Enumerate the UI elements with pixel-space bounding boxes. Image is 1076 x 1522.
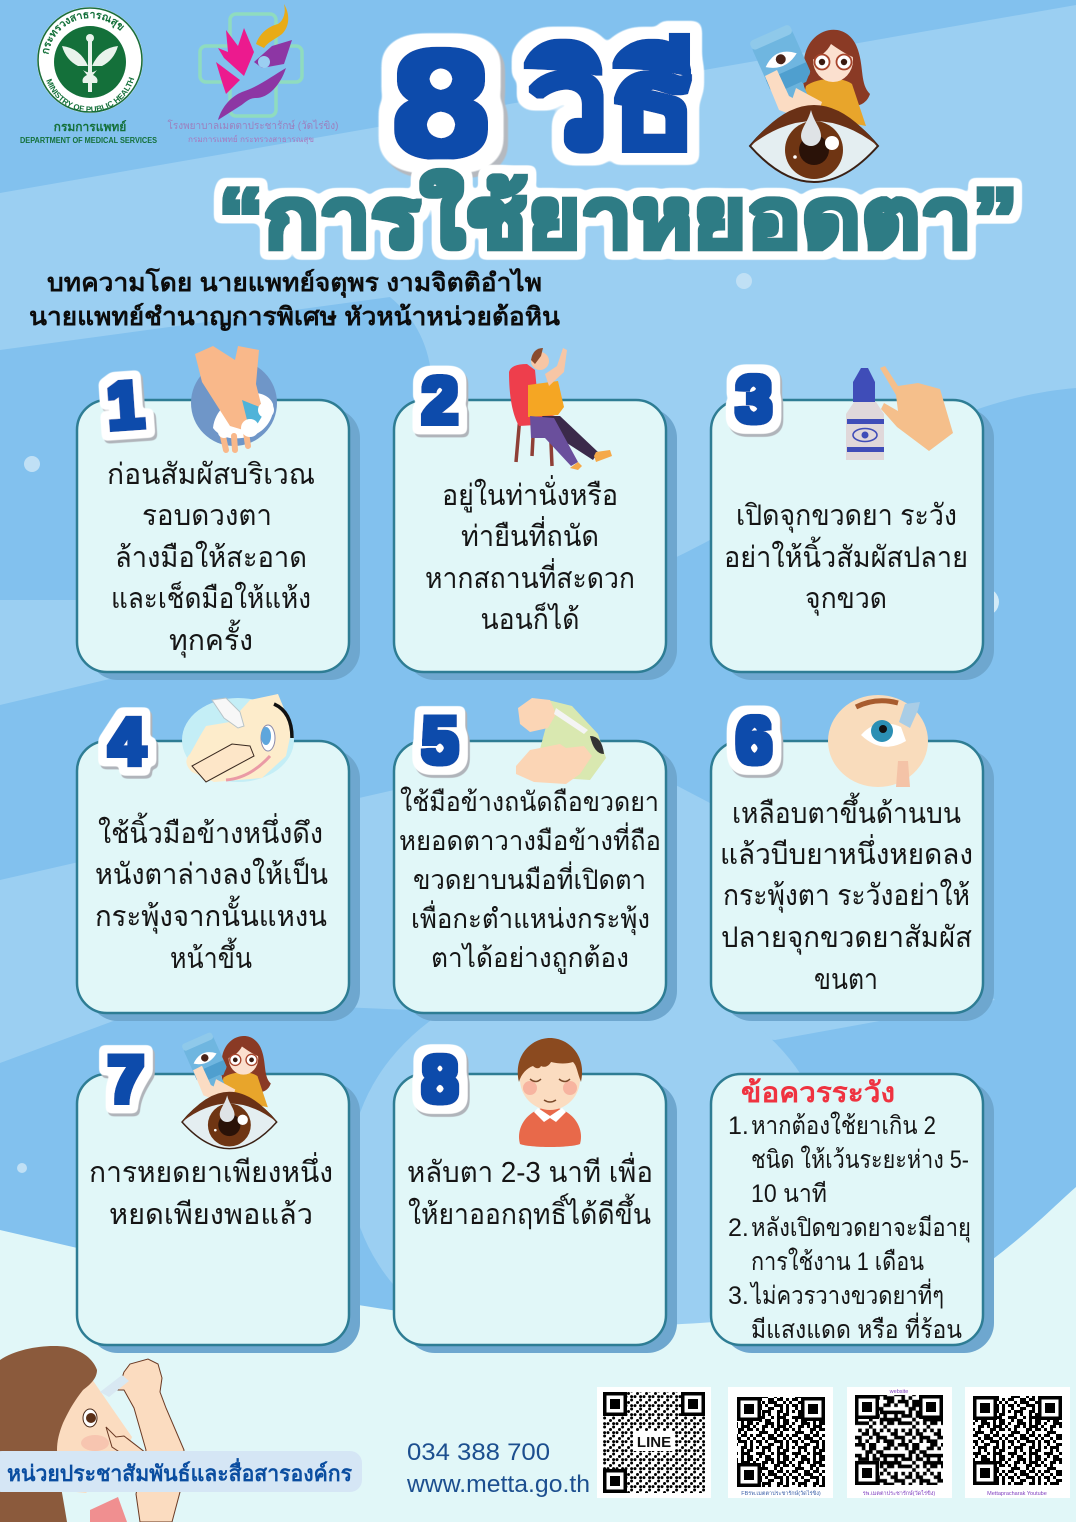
author text: บทความโดย นายแพทย์จตุพร งามจิตติอำไพ <box>47 267 542 299</box>
step 2 text <box>425 475 635 636</box>
panel: step 2 <box>394 348 677 680</box>
step 1 text: ทุกครั้ง <box>169 619 253 658</box>
contact details: www.metta.go.th <box>406 1471 590 1498</box>
icon: person sitting <box>509 348 612 470</box>
panel: step 7 <box>77 1032 360 1353</box>
step 2 text: อยู่ในท่านั่งหรือ <box>442 475 618 513</box>
step 4 text: ใช้นิ้วมือข้างหนึ่งดึง <box>98 812 323 850</box>
icon: bottle and finger <box>846 366 953 460</box>
logo: Ministry of Public Health: DEPARTMENT OF MEDICAL SERVICES <box>20 136 157 145</box>
step 5 text <box>399 786 661 974</box>
contact details: 034 388 700 <box>407 1439 550 1466</box>
step 6 text: แล้วบีบยาหนึ่งหยดลง <box>720 834 973 871</box>
step 3 text: อย่าให้นิ้วสัมผัสปลาย <box>724 536 968 574</box>
step 5 text: หยอดตาวางมือข้างที่ถือ <box>399 822 661 856</box>
cautions list <box>728 1111 971 1344</box>
step 1 text: และเช็ดมือให้แห้ง <box>111 580 311 615</box>
QR code: Facebook: FBรพ.เมตตาประชารักษ์(วัดไร่ขิง) <box>741 1490 821 1497</box>
step 4 text <box>95 812 328 975</box>
logo: Ministry of Public Health: กรมการแพทย์ <box>54 120 126 134</box>
cautions list: มีแสงแดด หรือ ที่ร้อน <box>751 1312 962 1344</box>
badge: number 7: 7 <box>108 1042 144 1116</box>
badge: number 6: 6 <box>736 703 772 777</box>
panel: step 5 <box>394 698 677 1021</box>
author text <box>29 267 560 331</box>
badge: number 1: 1 <box>104 367 146 443</box>
QR code: YouTube <box>965 1387 1070 1498</box>
step 6 text: ปลายจุกขวดยาสัมผัส <box>721 922 972 955</box>
logo: Ministry of Public Health: MINISTRY OF PUBLIC HEALTH <box>46 77 134 112</box>
contact details <box>406 1439 590 1498</box>
step 6 text: กระพุ้งตา ระวังอย่าให้ <box>723 878 970 913</box>
badge: number 4: 4 <box>109 704 146 778</box>
QR code: website: รพ.เมตตาประชารักษ์(วัดไร่ขิง) <box>863 1490 935 1497</box>
step 5 text: ใช้มือข้างถนัดถือขวดยา <box>400 786 659 817</box>
title: การใช้ยาหยอดตา: “การใช้ยาหยอดตา” <box>218 170 1018 265</box>
step 3 text: จุกขวด <box>805 583 887 616</box>
step 8 text: ให้ยาออกฤทธิ์ได้ดีขึ้น <box>408 1193 651 1231</box>
step 2 text: นอนก็ได้ <box>480 601 580 636</box>
title: 8: 8 <box>393 20 489 187</box>
QR code: LINE <box>597 1387 711 1498</box>
cautions list: หลังเปิดขวดยาจะมีอายุ <box>751 1214 971 1243</box>
badge: number 2: 2 <box>422 363 458 437</box>
cautions list: 3. <box>728 1282 749 1310</box>
icon: girl with eye drop bottle and eye <box>749 24 878 182</box>
illustration: girl applying eye drops <box>0 1346 184 1522</box>
logo: Metta hospital: โรงพยาบาลเมตตาประชารักษ์ (วัดไร่ขิง) <box>168 119 338 132</box>
step 3 text <box>724 500 968 616</box>
step 8 text: หลับตา 2-3 นาที เพื่อ <box>407 1152 653 1189</box>
step 3 text: เปิดจุกขวดยา ระวัง <box>736 500 957 533</box>
step 5 text: ขวดยาบนมือที่เปิดตา <box>413 861 646 895</box>
cautions list: ชนิด ให้เว้นระยะห่าง 5- <box>751 1145 969 1174</box>
QR code: YouTube: Mettapracharak Youtube <box>987 1491 1047 1497</box>
step 5 text: ตาได้อย่างถูกต้อง <box>431 943 629 974</box>
step 4 text: หนังตาล่างลงให้เป็น <box>95 856 328 891</box>
step 6 text <box>720 792 973 996</box>
step 4 text: กระพุ้งจากนั้นแหงน <box>95 895 327 934</box>
cautions list: การใช้งาน 1 เดือน <box>751 1247 924 1276</box>
icon: eye with drop bottle <box>828 695 928 787</box>
logo: Metta hospital: กรมการแพทย์ กระทรวงสาธารณสุข <box>188 134 314 144</box>
step 1 text <box>107 459 315 658</box>
logo: Ministry of Public Health <box>20 7 157 145</box>
step 6 text: เหลือบตาขึ้นด้านบน <box>732 792 961 830</box>
cautions list: ไม่ควรวางขวดยาที่ๆ <box>749 1278 944 1310</box>
label: public relations unit <box>0 1451 362 1492</box>
step 6 text: ขนตา <box>814 964 878 996</box>
label: public relations unit: หน่วยประชาสัมพันธ์และสื่อสารองค์กร <box>7 1457 352 1486</box>
cautions list: 1. <box>728 1112 749 1140</box>
panel: step 4 <box>77 694 360 1021</box>
icon: washing hands <box>191 346 277 450</box>
step 7 text <box>89 1152 333 1231</box>
badge: number 5: 5 <box>422 703 458 777</box>
icon: pulling eyelid <box>182 694 294 782</box>
panel: step 8 <box>394 1038 677 1353</box>
panel: step 1 <box>77 346 360 680</box>
badge: number 3: 3 <box>736 362 772 436</box>
author text: นายแพทย์ชำนาญการพิเศษ หัวหน้าหน่วยต้อหิน <box>29 302 560 331</box>
logo: Metta hospital <box>168 4 338 144</box>
QR code: website: website <box>889 1389 908 1395</box>
panel: step 3 <box>711 362 994 680</box>
title: วิธี: วิธี <box>526 30 698 176</box>
step 2 text: หากสถานที่สะดวก <box>425 558 635 595</box>
step 5 text: เพื่อกะตำแหน่งกระพุ้ง <box>411 900 650 936</box>
step 2 text: ท่ายืนที่ถนัด <box>461 516 599 553</box>
panel: step 6 <box>711 695 994 1021</box>
QR code: Facebook <box>728 1387 833 1498</box>
logo: Ministry of Public Health: กระทรวงสาธารณสุข <box>42 12 124 54</box>
badge: number 8: 8 <box>422 1042 458 1116</box>
cautions list: หากต้องใช้ยาเกิน 2 <box>751 1111 936 1140</box>
icon: hands with bottle <box>516 698 606 784</box>
heading: cautions: ข้อควรระวัง <box>741 1077 895 1108</box>
step 1 text: รอบดวงตา <box>142 500 272 532</box>
cautions list: 2. <box>728 1214 749 1242</box>
step 4 text: หน้าขึ้น <box>170 937 252 975</box>
step 1 text: ล้างมือให้สะอาด <box>115 540 307 574</box>
step 1 text: ก่อนสัมผัสบริเวณ <box>107 459 315 491</box>
panel: cautions <box>711 1074 994 1353</box>
QR code: website <box>847 1387 952 1498</box>
icon: boy closing eyes <box>518 1038 582 1147</box>
step 8 text <box>407 1152 653 1231</box>
step 7 text: การหยดยาเพียงหนึ่ง <box>89 1152 333 1189</box>
cautions list: 10 นาที <box>751 1180 827 1208</box>
step 7 text: หยดเพียงพอแล้ว <box>109 1199 313 1231</box>
icon: girl with eye drop <box>181 1032 277 1149</box>
QR code: LINE: LINE <box>637 1434 671 1451</box>
